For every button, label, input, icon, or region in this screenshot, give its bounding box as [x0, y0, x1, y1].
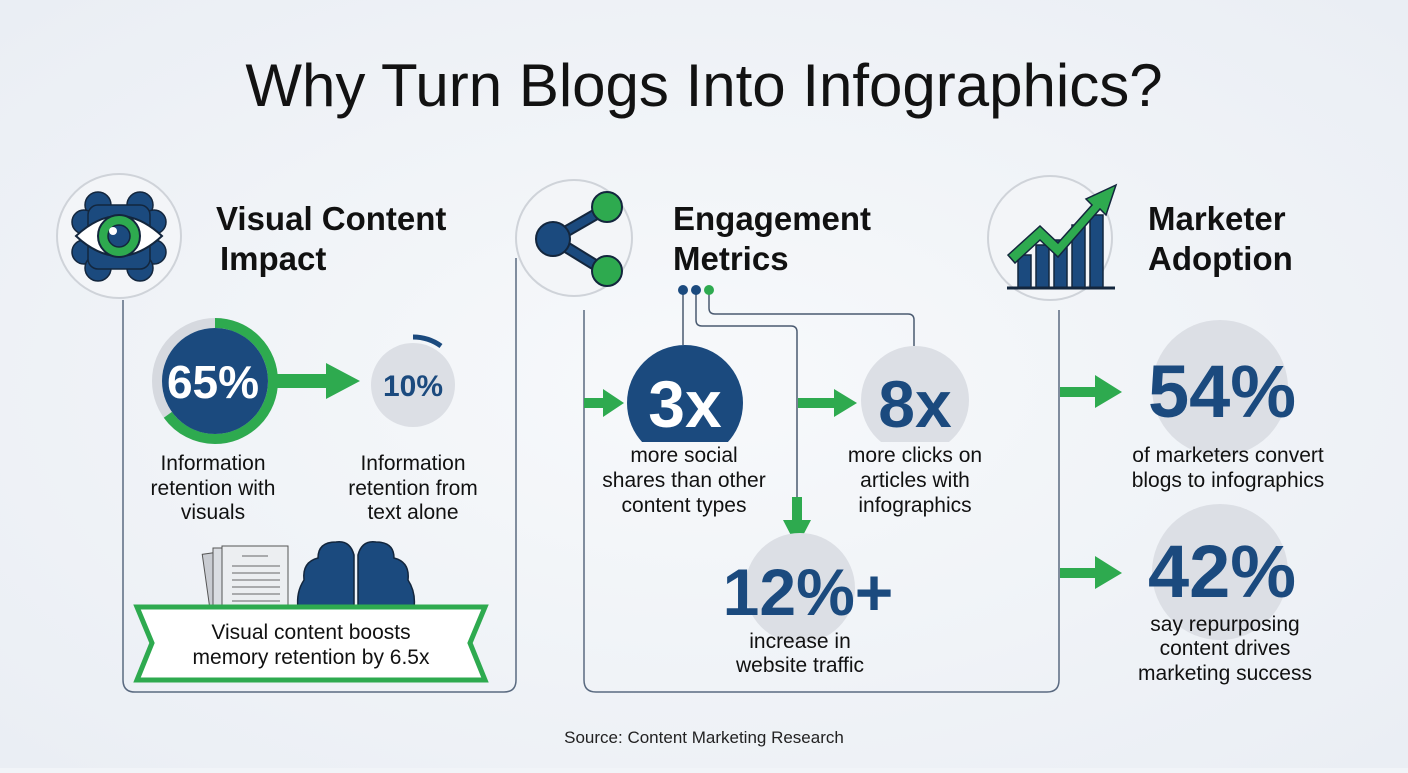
label: retention with visuals: Information	[160, 452, 266, 475]
stat: 42%: say repurposing	[1150, 613, 1300, 636]
label: retention from text: retention from	[348, 477, 478, 500]
label: retention from text: Information	[360, 452, 466, 475]
arrow: down to 12%	[783, 497, 811, 547]
chart: 65% donut: 65%	[167, 356, 259, 408]
stat: 42%: content drives	[1160, 637, 1290, 660]
icon: brain	[298, 542, 414, 608]
label: retention with visuals: retention with	[151, 477, 275, 500]
stat: 8x: more clicks on	[848, 444, 982, 467]
stat: 8x: articles with	[860, 469, 970, 492]
stat: 3x: content types	[622, 494, 746, 517]
label: retention with visuals: visuals	[181, 501, 245, 524]
heading: visual content impact: Impact	[220, 240, 326, 277]
heading: engagement metrics: Engagement	[673, 200, 871, 237]
heading: marketer adoption: Adoption	[1148, 240, 1293, 277]
heading: marketer adoption: Marketer	[1148, 200, 1286, 237]
heading: engagement metrics: Metrics	[673, 240, 789, 277]
stat: 8x: 8x	[878, 367, 952, 441]
stat: 3x	[602, 345, 766, 517]
icon: growth chart	[988, 176, 1116, 300]
stat: 8x	[848, 346, 982, 517]
stat: 42%: marketing success	[1138, 662, 1312, 685]
stat: 12%	[723, 533, 893, 677]
label: retention from text: text alone	[367, 501, 459, 524]
panel: visual content impact	[57, 174, 516, 692]
stat: 12%: 12%+	[723, 555, 893, 629]
icon: share	[516, 180, 632, 296]
chart: 10% circle	[371, 337, 455, 427]
arrow: into 3x	[584, 389, 624, 417]
stat: 42%: 42%	[1148, 530, 1296, 613]
connector lines	[678, 285, 914, 500]
icon: documents	[202, 546, 288, 609]
source note: Source: Content Marketing Research	[564, 728, 844, 747]
arrow: 65 to 10	[272, 363, 360, 399]
stat: 54%: blogs to infographics	[1132, 469, 1324, 492]
arrow: to 42%	[1060, 556, 1122, 589]
arrow: to 54%	[1060, 375, 1122, 408]
stat: 3x: more social	[630, 444, 738, 467]
stat: 42%	[1138, 504, 1312, 685]
stat: 3x: shares than other	[602, 469, 766, 492]
heading: visual content impact: Visual Content	[216, 200, 446, 237]
stat: 54%: of marketers convert	[1132, 444, 1324, 467]
title: Why Turn Blogs Into Infographics?	[245, 52, 1163, 119]
stat: 8x: infographics	[858, 494, 972, 517]
icon: eye brain	[57, 174, 181, 298]
stat: 54%: 54%	[1148, 350, 1296, 433]
banner: memory retention	[137, 607, 485, 680]
panel: engagement metrics	[516, 180, 1059, 692]
stat: 3x: 3x	[648, 367, 722, 441]
chart: 10% circle: 10%	[383, 370, 443, 403]
banner: memory retention: Visual content boosts	[211, 621, 411, 644]
stat: 54%	[1132, 320, 1324, 492]
chart: 65% donut	[157, 323, 273, 439]
panel: marketer adoption	[988, 176, 1324, 685]
stat: 12%: increase in	[749, 630, 851, 653]
banner: memory retention: memory retention by 6.5x	[193, 646, 430, 669]
stat: 12%: website traffic	[735, 654, 864, 677]
arrow: into 8x	[798, 389, 857, 417]
